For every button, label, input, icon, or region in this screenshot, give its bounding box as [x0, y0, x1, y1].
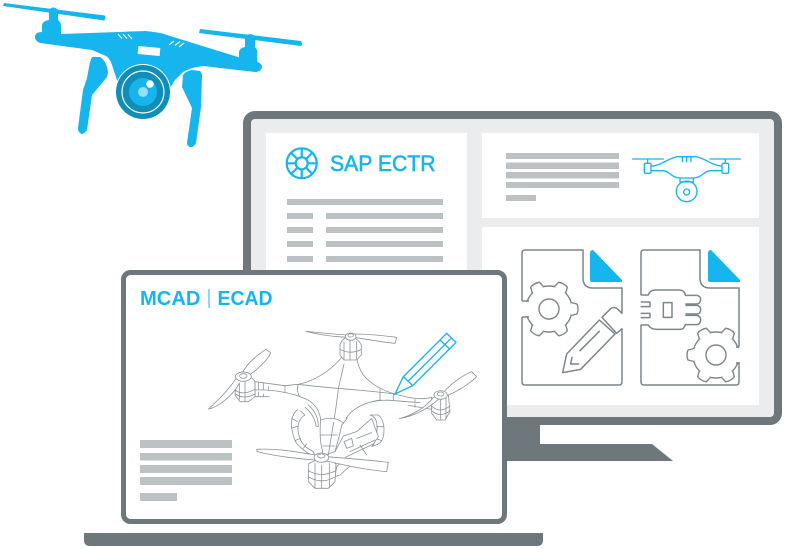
panel: SAP ECTR document — [266, 133, 467, 283]
monitor — [247, 115, 778, 461]
icon: outline drone — [633, 157, 741, 202]
left landing leg — [78, 57, 108, 134]
gear — [521, 281, 578, 337]
left motor — [235, 375, 255, 402]
plug — [641, 290, 701, 329]
laptop — [84, 272, 543, 546]
monitor frame — [247, 115, 778, 421]
right motor — [432, 393, 450, 420]
wireframe drone — [208, 331, 477, 488]
landing legs — [291, 409, 315, 456]
laptop screen — [124, 272, 504, 522]
pencil — [563, 307, 622, 373]
text lines — [287, 199, 443, 262]
window and vents — [118, 34, 184, 56]
heading: MCAD | ECAD: ECAD — [218, 288, 272, 310]
gear — [687, 327, 744, 383]
text lines — [140, 440, 232, 501]
heading: MCAD | ECAD: MCAD — [140, 288, 200, 310]
body shell — [255, 357, 432, 457]
icon: blue pencil — [395, 333, 456, 394]
propeller right — [199, 29, 302, 46]
monitor stand — [480, 420, 673, 461]
panel: CAD files — [482, 227, 759, 405]
text lines — [506, 153, 619, 201]
top motor — [340, 336, 361, 360]
motor left — [42, 8, 61, 34]
icon: document with gear and pencil — [521, 250, 622, 385]
icon: SAP ECTR wheel — [287, 148, 317, 178]
heading: MCAD | ECAD — [140, 288, 272, 310]
motor right — [239, 34, 257, 63]
front motor — [308, 460, 336, 488]
blue drone illustration — [3, 3, 302, 147]
laptop base — [84, 533, 543, 546]
icon: document with plug and gear — [641, 250, 744, 385]
propeller left — [3, 3, 105, 20]
panel: drone summary — [482, 133, 759, 218]
camera and battery — [335, 418, 378, 477]
drone body — [35, 31, 262, 105]
heading: SAP ECTR: SAP ECTR — [330, 151, 436, 176]
camera lens — [115, 64, 171, 120]
right landing leg — [182, 70, 202, 147]
